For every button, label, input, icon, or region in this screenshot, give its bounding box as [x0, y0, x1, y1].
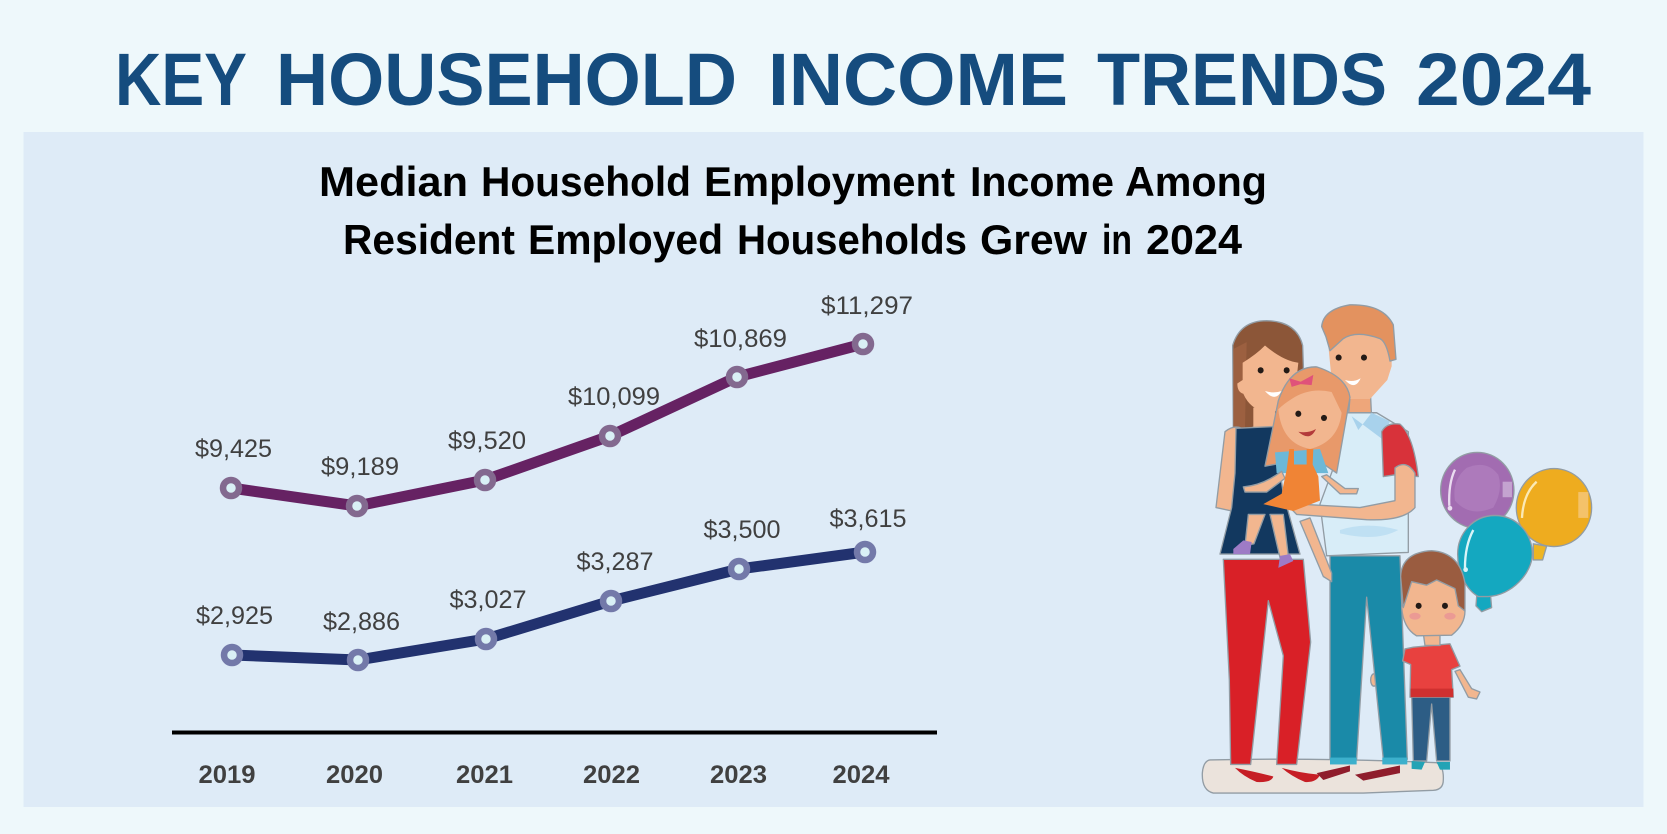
balloons — [1441, 452, 1592, 612]
chart heading: Grew — [980, 216, 1087, 263]
title — [115, 38, 1591, 121]
data labels: lower series — [196, 505, 906, 636]
data labels: lower series: $3,615 — [830, 505, 906, 533]
data labels: upper series: $11,297 — [821, 292, 913, 320]
title: HOUSEHOLD — [276, 38, 737, 121]
girl — [1233, 367, 1358, 582]
title: 2024 — [1416, 38, 1591, 121]
data labels: lower series: $2,925 — [196, 602, 273, 630]
x axis years: 2020 — [326, 761, 383, 789]
x axis years: 2023 — [710, 761, 767, 789]
series line: upper purple — [223, 336, 871, 514]
data labels: lower series: $2,886 — [323, 608, 400, 636]
chart heading: Employed — [528, 216, 723, 263]
data labels: upper series: $9,520 — [448, 427, 526, 455]
chart heading: Household — [481, 158, 691, 205]
data labels: upper series: $9,425 — [195, 435, 272, 463]
chart heading: Median — [319, 158, 468, 205]
x axis years: 2022 — [583, 761, 640, 789]
data labels: upper series: $10,869 — [694, 325, 787, 353]
x axis line — [172, 730, 937, 734]
chart heading: Income — [970, 158, 1114, 205]
ground patch — [1202, 759, 1443, 793]
chart heading: 2024 — [1146, 216, 1243, 263]
chart heading — [319, 158, 1267, 263]
line chart — [172, 292, 937, 789]
chart heading: Employment — [704, 158, 955, 205]
man — [1290, 305, 1418, 781]
chart heading: Households — [737, 216, 967, 263]
data labels: upper series — [195, 292, 913, 481]
x axis years — [198, 761, 890, 789]
boy — [1401, 551, 1480, 770]
title: TRENDS — [1097, 38, 1387, 121]
data labels: upper series: $9,189 — [321, 453, 399, 481]
illustration: family with balloons — [1202, 305, 1592, 793]
title: KEY — [115, 38, 247, 121]
series line: lower navy — [224, 544, 873, 668]
x axis years: 2024 — [832, 761, 890, 789]
data labels: upper series: $10,099 — [568, 383, 660, 411]
title: INCOME — [768, 38, 1068, 121]
panel: chart background — [24, 132, 1644, 807]
woman — [1216, 321, 1320, 782]
chart heading: Among — [1125, 158, 1267, 205]
data labels: lower series: $3,500 — [704, 516, 780, 544]
chart heading: Resident — [343, 216, 515, 263]
chart heading: in — [1102, 216, 1132, 263]
data labels: lower series: $3,287 — [576, 548, 654, 576]
data labels: lower series: $3,027 — [450, 586, 526, 614]
x axis years: 2021 — [456, 761, 513, 789]
x axis years: 2019 — [198, 761, 256, 789]
